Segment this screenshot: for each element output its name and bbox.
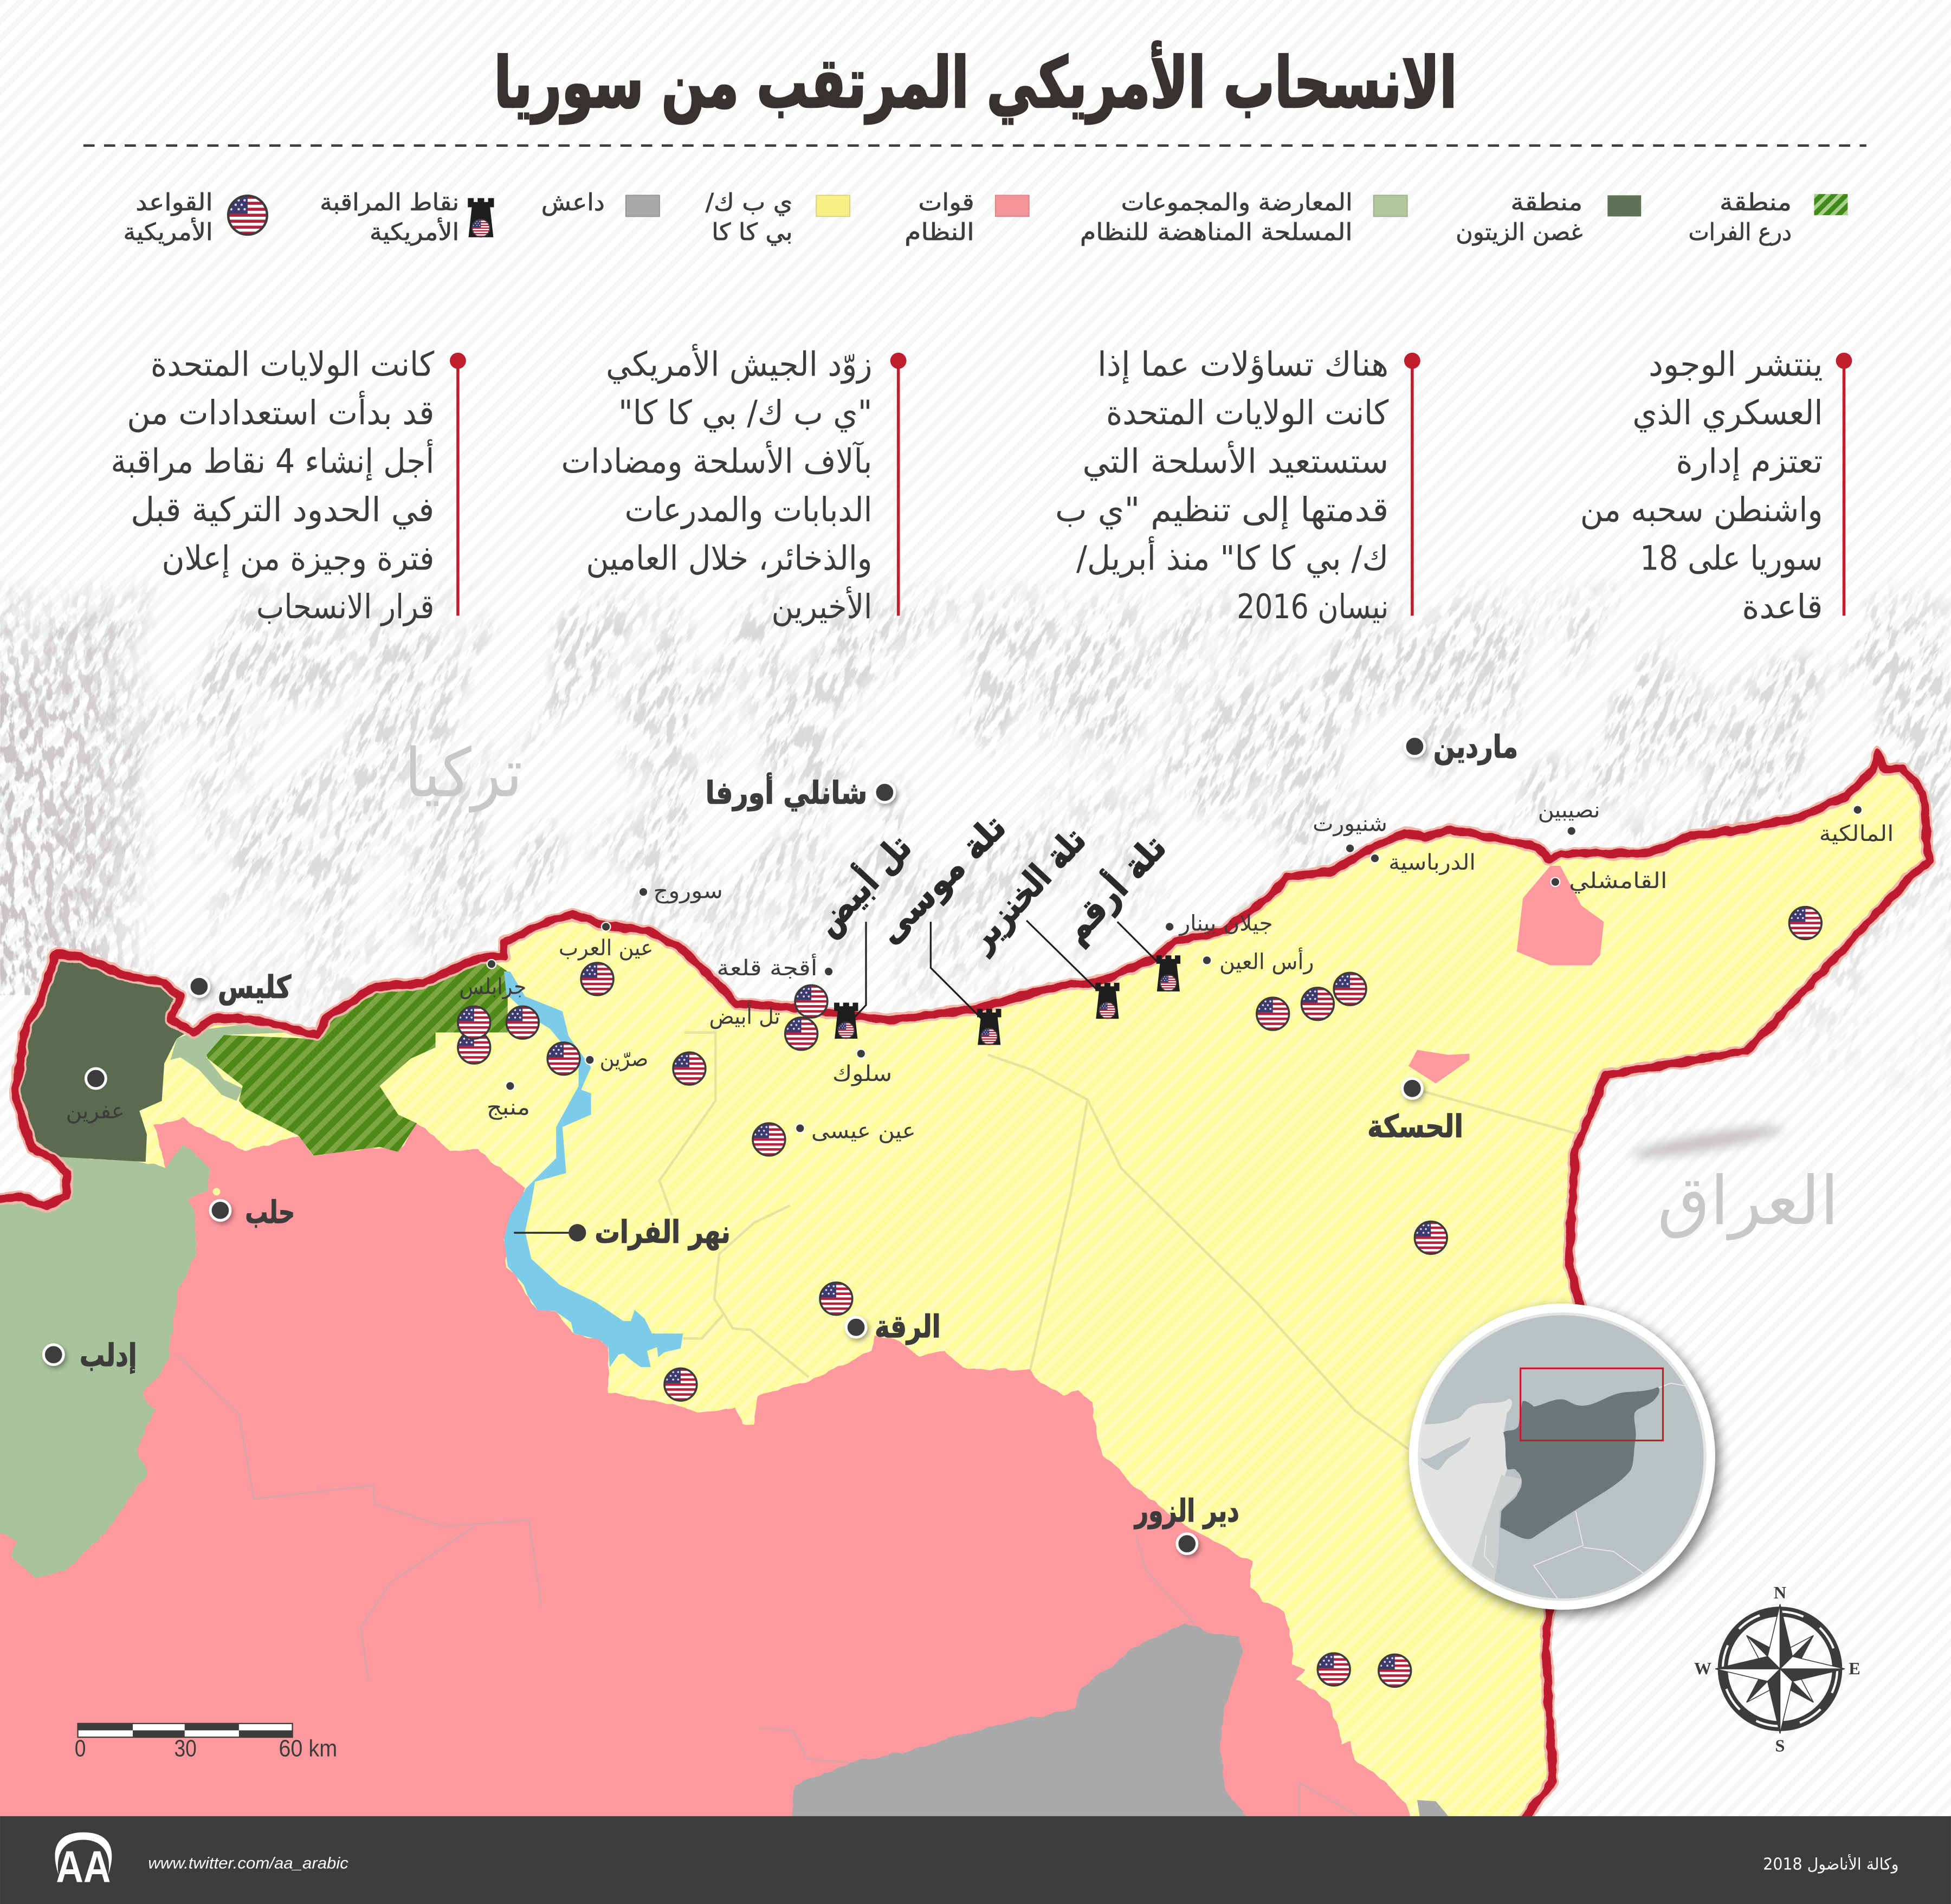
legend: Olive Branch: غصن الزيتون xyxy=(1456,219,1582,246)
inset Cyprus xyxy=(1420,1437,1471,1470)
town: Malikiyah: المالكية xyxy=(1819,821,1894,846)
zone: regime pink xyxy=(0,1118,1417,1835)
text column 1: ينتشر الوجود xyxy=(1649,344,1823,384)
compass rose: N xyxy=(1774,1583,1786,1602)
city: Deir ez-Zor xyxy=(1134,1493,1239,1553)
compass rose xyxy=(1694,1583,1860,1756)
legend xyxy=(123,189,1847,246)
legend: US bases xyxy=(123,189,269,246)
column 3 red rule xyxy=(890,353,907,616)
text column 3: بآلاف الأسلحة ومضادات xyxy=(561,440,872,481)
dashed divider xyxy=(83,145,1866,146)
text column 4: فترة وجيزة من إعلان xyxy=(162,538,434,578)
zone: regime pink Hasakah xyxy=(1409,1050,1469,1084)
text column 2: نيسان 2016 xyxy=(1237,587,1388,626)
town: Darbasiyah: الدرباسية xyxy=(1388,850,1476,875)
legend: regime: قوات xyxy=(918,189,974,216)
legend: Euphrates Shield: منطقة xyxy=(1720,189,1792,216)
city: Mardin xyxy=(1405,729,1518,765)
legend: US observation posts xyxy=(320,189,494,246)
zone: Olive Branch Afrin xyxy=(15,954,186,1162)
town: Jarabulus xyxy=(459,960,526,999)
inset locator map xyxy=(1393,1294,1735,1616)
inset Lebanon and Israel xyxy=(1471,1475,1522,1584)
twitter address: www.twitter.com/aa_arabic xyxy=(148,1854,348,1872)
text column 1 xyxy=(1580,344,1852,626)
town: Ceylanpinar: جيلان بينار xyxy=(1178,911,1273,936)
rotated label: Tal Arqam: تلة أرقم xyxy=(1052,825,1174,951)
city: Hasakah xyxy=(1367,1078,1463,1144)
city: Raqqa xyxy=(846,1309,941,1345)
legend: ISIS xyxy=(541,189,660,216)
observation post: Tal Abyad xyxy=(834,1002,858,1039)
country label: Turkey: تركيا xyxy=(404,734,522,813)
text column 3: والذخائر، خلال العامين xyxy=(586,538,872,578)
observation post: Tal Musa xyxy=(977,1009,1001,1045)
text column 3: زوّد الجيش الأمريكي xyxy=(606,343,872,384)
town: Suluk: سلوك xyxy=(832,1061,892,1086)
town: Sarrin: صرّين xyxy=(600,1047,648,1072)
legend: regime xyxy=(905,189,1029,246)
town: Tal Abyad: تل أبيض xyxy=(709,1002,780,1029)
city: Mardin: ماردين xyxy=(1433,729,1518,765)
legend: regime: النظام xyxy=(905,219,974,246)
city: Deir ez-Zor: دير الزور xyxy=(1134,1493,1239,1530)
city: Kilis: كليس xyxy=(218,969,292,1005)
legend: Olive Branch xyxy=(1456,189,1641,246)
text column 1: العسكري الذي xyxy=(1632,393,1823,432)
Euphrates river xyxy=(504,972,683,1367)
leader lines to observation posts xyxy=(846,921,1158,1026)
text column 3 xyxy=(561,343,907,626)
town: Malikiyah xyxy=(1819,805,1894,846)
column 1 red rule xyxy=(1836,353,1852,616)
zone: Euphrates Shield hatch xyxy=(206,958,508,1156)
label: Euphrates river xyxy=(514,1214,731,1251)
legend: Euphrates Shield xyxy=(1689,189,1847,246)
city: Sanliurfa: شانلي أورفا xyxy=(706,773,867,812)
zone: ISIS grey small xyxy=(1417,1800,1448,1816)
copyright: وكالة الأناضول 2018 xyxy=(1763,1854,1899,1874)
column 2 red rule xyxy=(1404,353,1420,616)
observation post: Tal Arqam xyxy=(1157,955,1180,992)
text column 2: هناك تساؤلات عما إذا xyxy=(1097,344,1388,384)
label: Euphrates river: نهر الفرات xyxy=(595,1214,731,1251)
legend: YPG/PKK xyxy=(706,189,850,246)
city: Kilis xyxy=(189,969,292,1005)
city: Raqqa: الرقة xyxy=(875,1309,941,1345)
inset borders xyxy=(1484,1383,1690,1599)
text column 4 xyxy=(111,344,466,626)
footer bar xyxy=(0,1816,1951,1904)
legend: YPG/PKK: بي كا كا xyxy=(712,219,793,246)
text column 1: قاعدة xyxy=(1742,587,1823,626)
town: Qamishli: القامشلي xyxy=(1569,869,1667,893)
zone: regime pink Qamishli xyxy=(1517,866,1604,966)
town: Nusaybin: نصيبين xyxy=(1538,798,1600,823)
town: Ras al-Ayn: رأس العين xyxy=(1219,947,1314,974)
city: Idlib xyxy=(43,1337,137,1374)
legend: US bases: الأمريكية xyxy=(123,217,213,246)
text column 2: كانت الولايات المتحدة xyxy=(1106,393,1389,432)
legend: Olive Branch: منطقة xyxy=(1510,189,1582,216)
town: Manbij xyxy=(487,1081,530,1120)
text column 4: في الحدود التركية قبل xyxy=(131,490,434,529)
Turkey and Iraq border line xyxy=(0,753,1930,1829)
city: Aleppo: حلب xyxy=(245,1194,295,1231)
zone: opposition strip xyxy=(171,1024,289,1101)
legend: ISIS: داعش xyxy=(541,189,605,216)
scale bar xyxy=(75,1723,337,1762)
legend: US bases: القواعد xyxy=(135,189,213,216)
rotated label: Tal Abyad: تل أبيض xyxy=(805,825,920,944)
legend: opposition: المعارضة والمجموعات xyxy=(1121,189,1353,216)
legend: Euphrates Shield: درع الفرات xyxy=(1689,219,1792,246)
city: Hasakah: الحسكة xyxy=(1367,1108,1463,1144)
iraq relief patch xyxy=(1630,1120,1785,1164)
city: Idlib: إدلب xyxy=(80,1337,137,1374)
zone: ISIS grey xyxy=(790,1623,1257,1829)
country label: Iraq: العراق xyxy=(1657,1162,1839,1241)
town: Akcakale: أقجة قلعة xyxy=(716,954,817,981)
rotated label: Tal Khanzir: تلة الخنزير xyxy=(960,820,1094,960)
city: Afrin: عفرين xyxy=(66,1099,125,1124)
town: Jarabulus: جرابلس xyxy=(459,974,526,999)
text column 2 xyxy=(1055,344,1420,626)
zone: opposition Idlib xyxy=(0,1144,210,1578)
town: Senyurt: شنيورت xyxy=(1313,812,1387,837)
text column 2: ك/ بي كا كا" منذ أبريل/ xyxy=(1076,536,1388,578)
yellow zone stripes xyxy=(0,753,1930,1829)
town: Suluk xyxy=(832,1049,892,1086)
observation post: Tal Khanzir xyxy=(1095,983,1120,1019)
compass rose: W xyxy=(1694,1659,1711,1678)
text column 4: كانت الولايات المتحدة xyxy=(151,344,435,384)
darker relief on the west edge xyxy=(0,591,148,995)
text column 3: الدبابات والمدرعات xyxy=(625,490,872,529)
compass rose: E xyxy=(1849,1659,1860,1678)
small yellow spot near Aleppo xyxy=(213,1188,220,1195)
city: Aleppo xyxy=(210,1194,295,1231)
scale bar: 0 xyxy=(75,1736,86,1762)
map of northern Syria xyxy=(0,753,1930,1835)
text column 3: "ي ب ك/ بي كا كا" xyxy=(618,393,872,432)
town: Manbij: منبج xyxy=(487,1095,530,1120)
text column 1: سوريا على 18 xyxy=(1640,538,1823,578)
text column 2: قدمتها إلى تنظيم "ي ب xyxy=(1055,490,1388,530)
town: Suruc: سوروج xyxy=(653,879,723,904)
roads in yellow zone xyxy=(660,1033,1580,1449)
major cities xyxy=(43,729,1518,1553)
text column 4: أجل إنشاء 4 نقاط مراقبة xyxy=(111,439,434,481)
US bases xyxy=(457,905,1823,1688)
scale bar: 30 xyxy=(174,1736,197,1762)
legend: YPG/PKK: ي ب ك/ xyxy=(706,189,793,216)
town: Ayn Issa: عين عيسى xyxy=(811,1119,916,1144)
border glow xyxy=(0,753,1930,1829)
inset sea xyxy=(1393,1398,1512,1596)
town: Senyurt xyxy=(1313,812,1387,853)
AA logo: AA xyxy=(56,1842,111,1892)
text column 4: قرار الانسحاب xyxy=(256,587,434,626)
title: الانسحاب الأمريكي المرتقب من سوريا xyxy=(494,41,1457,124)
text column 1: واشنطن سحبه من xyxy=(1580,490,1823,529)
text column 1: تعتزم إدارة xyxy=(1676,441,1823,481)
inset red frame xyxy=(1521,1368,1663,1441)
town: Ayn al-Arab xyxy=(559,922,653,961)
scale bar: 60 km xyxy=(279,1736,337,1762)
rotated label: Tal Musa: تلة موسى xyxy=(869,807,1014,951)
zone: SDF yellow xyxy=(0,753,1930,1829)
terrain relief of Turkey xyxy=(0,584,1951,1076)
text column 3: الأخيرين xyxy=(771,586,872,626)
compass rose: S xyxy=(1775,1736,1785,1756)
legend: opposition: المسلحة المناهضة للنظام xyxy=(1080,219,1353,246)
inset Syria xyxy=(1500,1387,1659,1539)
legend: US observation posts: الأمريكية xyxy=(370,217,459,246)
town: Nusaybin xyxy=(1538,798,1600,836)
city: Afrin xyxy=(66,1068,125,1124)
town: Ayn al-Arab: عين العرب xyxy=(559,936,653,961)
small towns xyxy=(459,798,1894,1144)
text column 4: قد بدأت استعدادات من xyxy=(127,391,434,432)
text column 2: ستستعيد الأسلحة التي xyxy=(1082,440,1388,481)
column 4 red rule xyxy=(450,353,466,616)
roads in pink zone xyxy=(177,1355,1359,1816)
legend: opposition xyxy=(1080,189,1407,246)
legend: US observation posts: نقاط المراقبة xyxy=(320,189,459,216)
